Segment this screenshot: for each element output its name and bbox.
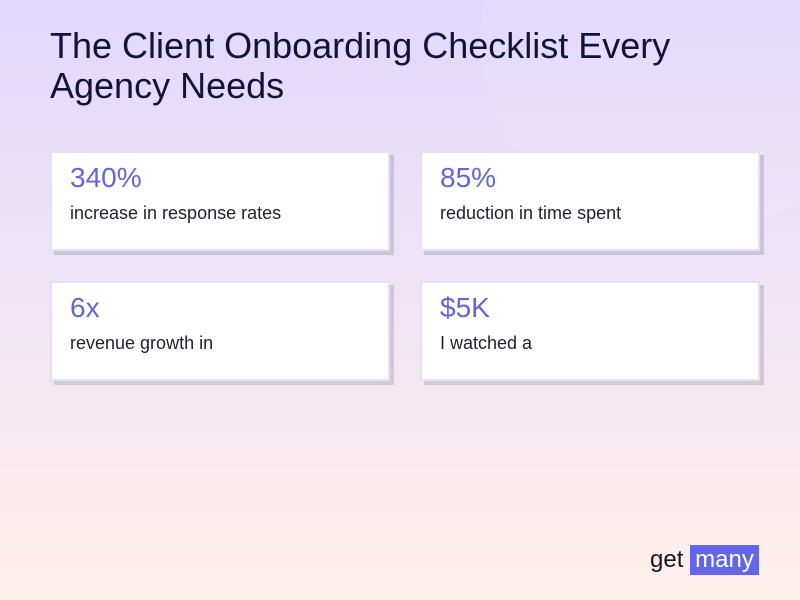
stat value: 85%	[440, 162, 496, 193]
stat label: reduction in time spent	[440, 203, 621, 223]
logo word: get: get	[650, 546, 683, 573]
stat value: 340%	[70, 162, 142, 193]
logo: get many	[650, 545, 759, 575]
stat label: increase in response rates	[70, 203, 281, 223]
stat label: I watched a	[440, 333, 532, 353]
stat card: 340%	[50, 151, 390, 251]
stat label: revenue growth in	[70, 333, 213, 353]
stat card: 6x	[50, 281, 390, 381]
stat card: 85%	[420, 151, 760, 251]
stat value: $5K	[440, 292, 490, 323]
logo word: many: many	[695, 546, 754, 573]
decorative background circle	[480, 0, 800, 240]
stat value: 6x	[70, 292, 100, 323]
stat card: $5K	[420, 281, 760, 381]
title: The Client Onboarding Checklist Every Agency Needs	[50, 25, 670, 106]
